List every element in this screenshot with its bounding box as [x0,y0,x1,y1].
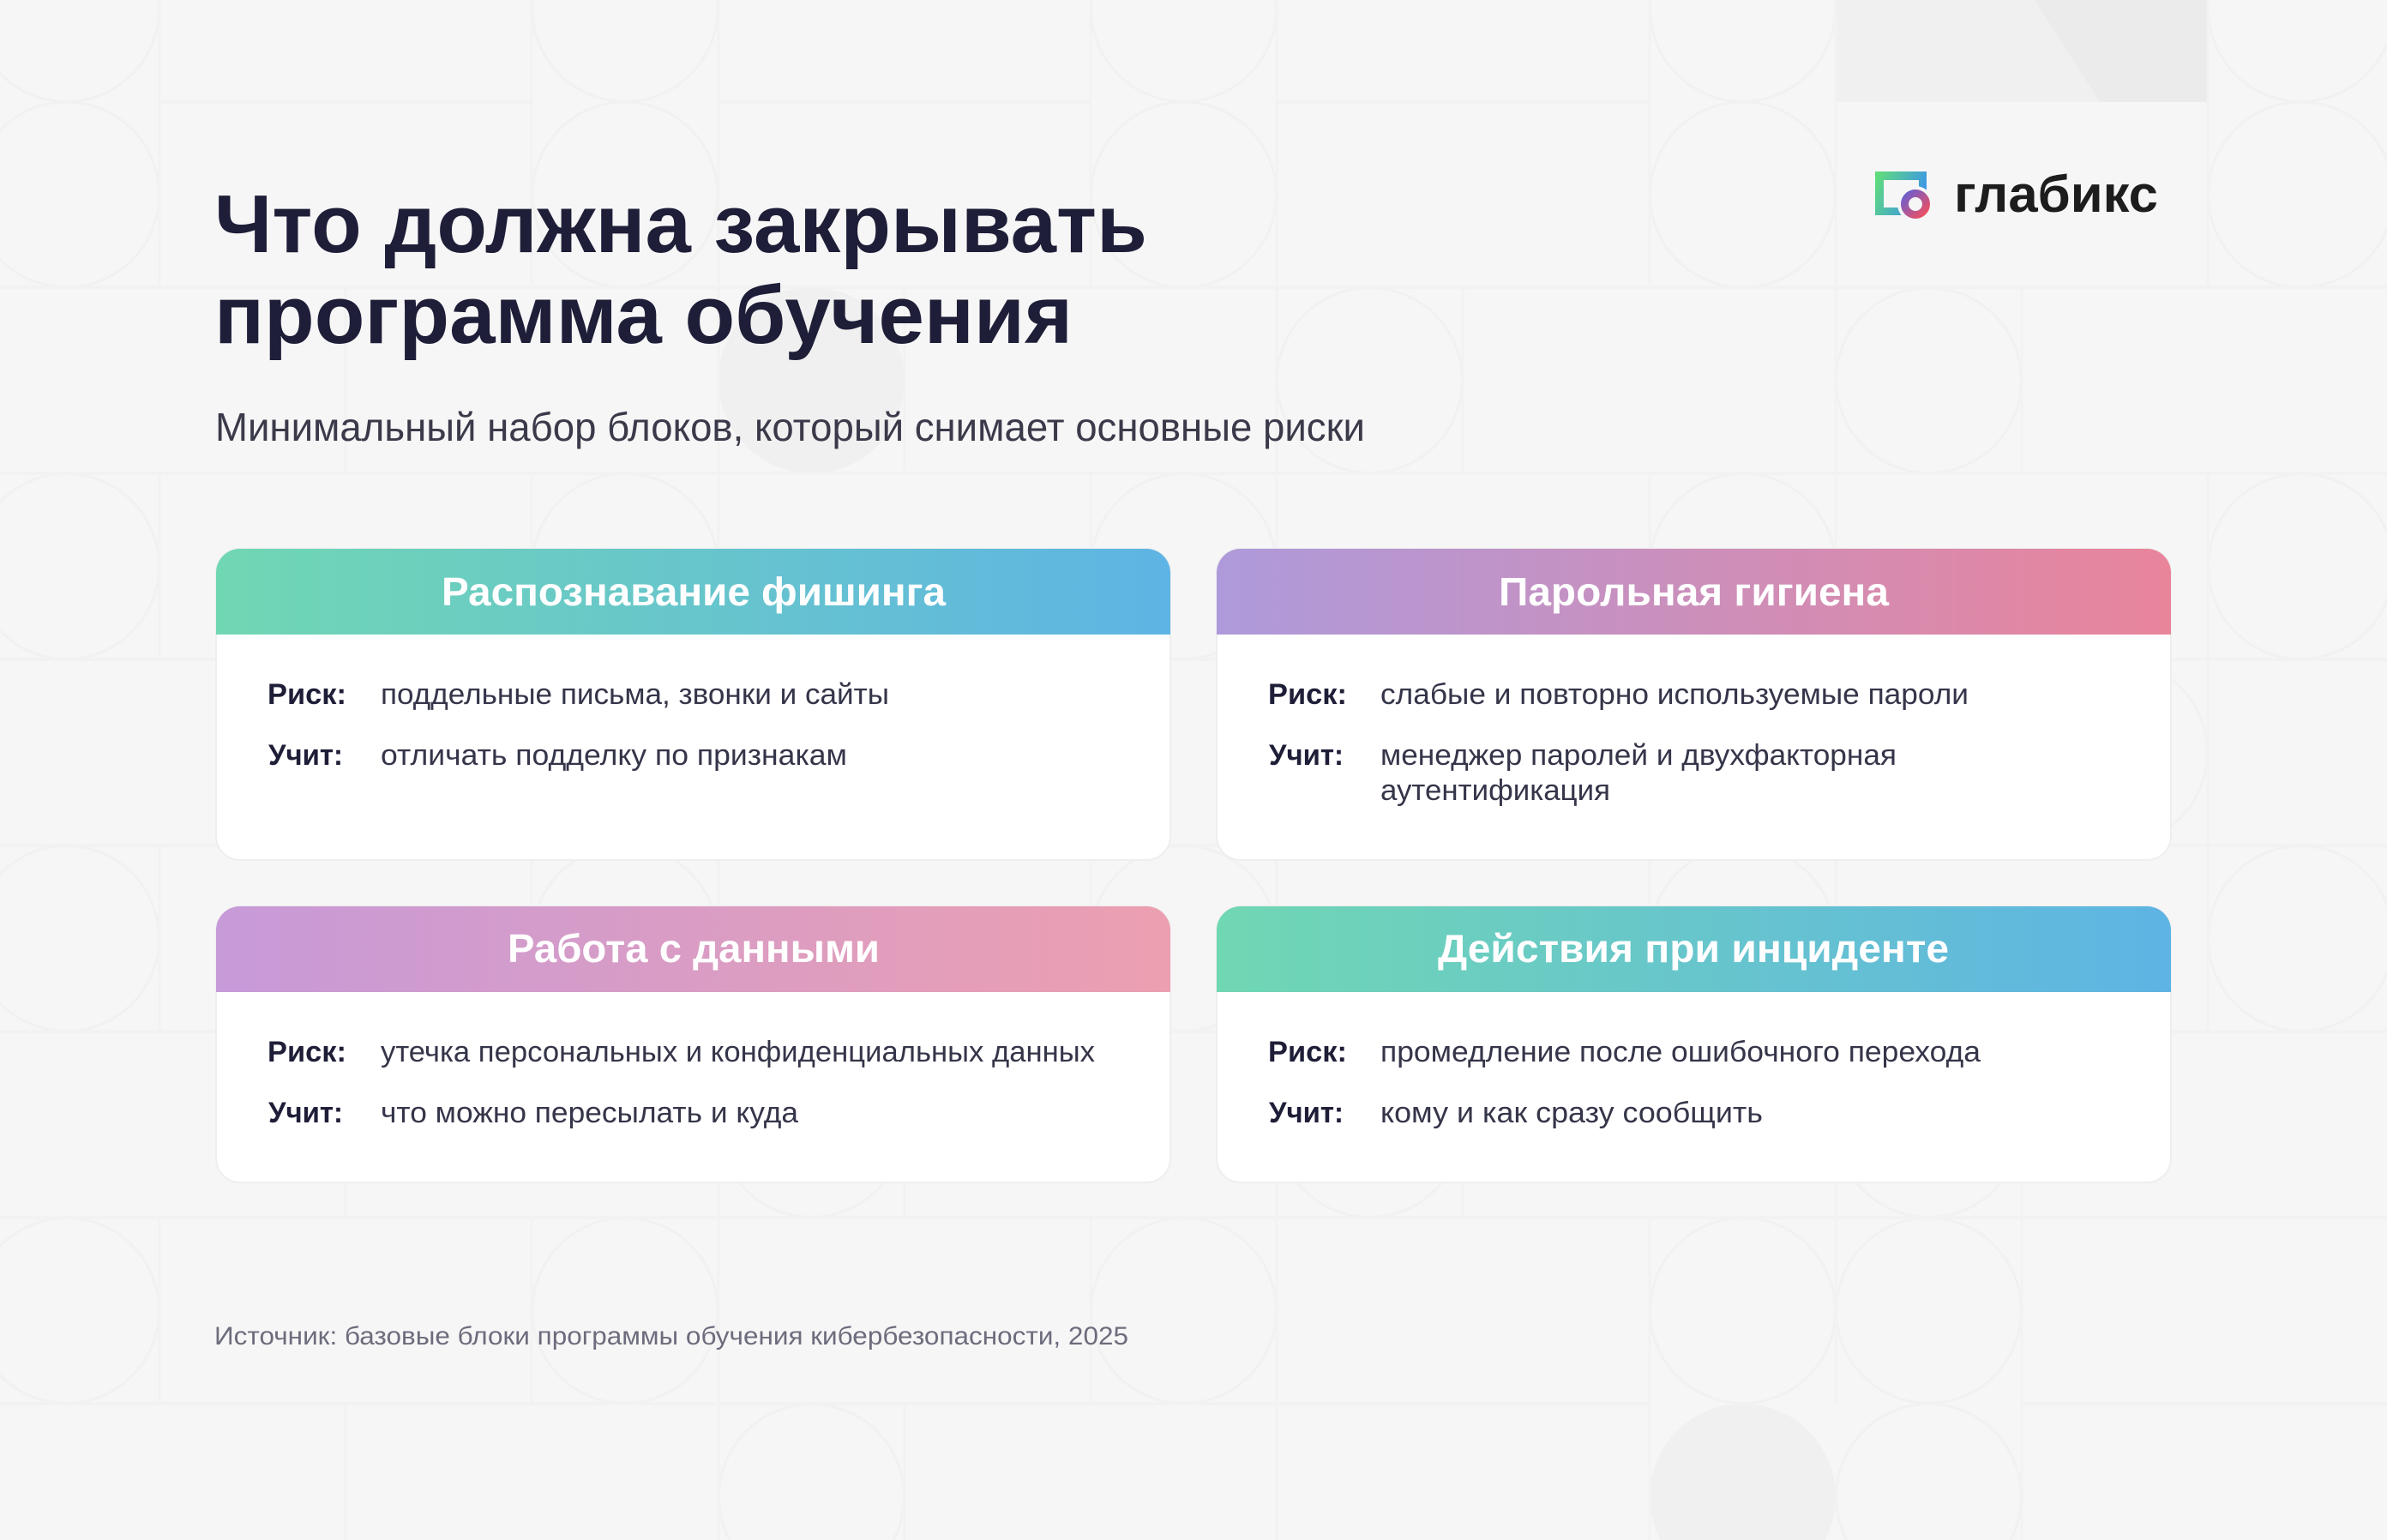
source footnote: Источник: базовые блоки программы обучения кибербезопасности, 2025 [214,1322,1128,1351]
logo wordmark: глабикс [1954,165,2158,223]
panel: Работа с данными: что можно пересылать и куда [381,1097,798,1129]
panel: Работа с данными: Учит: [268,1097,343,1129]
panel: Парольная гигиена: Риск: [1268,678,1347,711]
panel: Действия при инциденте: Риск: [1268,1036,1347,1068]
panel: Действия при инциденте: промедление после ошибочного перехода [1380,1036,1981,1068]
panel: Распознавание фишинга: отличать подделку по признакам [381,739,847,772]
panel: Парольная гигиена: аутентификация [1380,774,1610,807]
panel: Распознавание фишинга: Распознавание фишинга [442,569,946,614]
panel: Парольная гигиена: менеджер паролей и двухфакторная [1380,739,1897,772]
panel: Действия при инциденте: Учит: [1269,1097,1344,1129]
panel: Работа с данными: Риск: [268,1036,346,1068]
panel: Распознавание фишинга: поддельные письма, звонки и сайты [381,678,889,711]
panel: Работа с данными: Работа с данными [508,926,880,971]
logo: глабикс [1875,165,2158,223]
panel: Парольная гигиена: Учит: [1269,739,1344,772]
panel: Действия при инциденте: Действия при инциденте [1438,926,1949,971]
panel: Распознавание фишинга [216,549,1170,860]
panel: Распознавание фишинга: Учит: [268,739,343,772]
panel: Работа с данными [216,906,1170,1182]
subtitle: Минимальный набор блоков, который снимает основные риски [215,405,1365,449]
title: программа обучения [214,269,1073,361]
panel: Парольная гигиена: слабые и повторно используемые пароли [1380,678,1969,711]
title [214,178,1147,361]
title: Что должна закрывать [214,178,1147,270]
panel: Действия при инциденте: кому и как сразу сообщить [1380,1097,1763,1129]
panel: Действия при инциденте [1217,906,2171,1182]
panel: Распознавание фишинга: Риск: [268,678,346,711]
panel: Работа с данными: утечка персональных и конфиденциальных данных [381,1036,1095,1068]
panel: Парольная гигиена [1217,549,2171,860]
panel: Парольная гигиена: Парольная гигиена [1499,569,1889,614]
icon: logo mark [1875,171,1933,222]
